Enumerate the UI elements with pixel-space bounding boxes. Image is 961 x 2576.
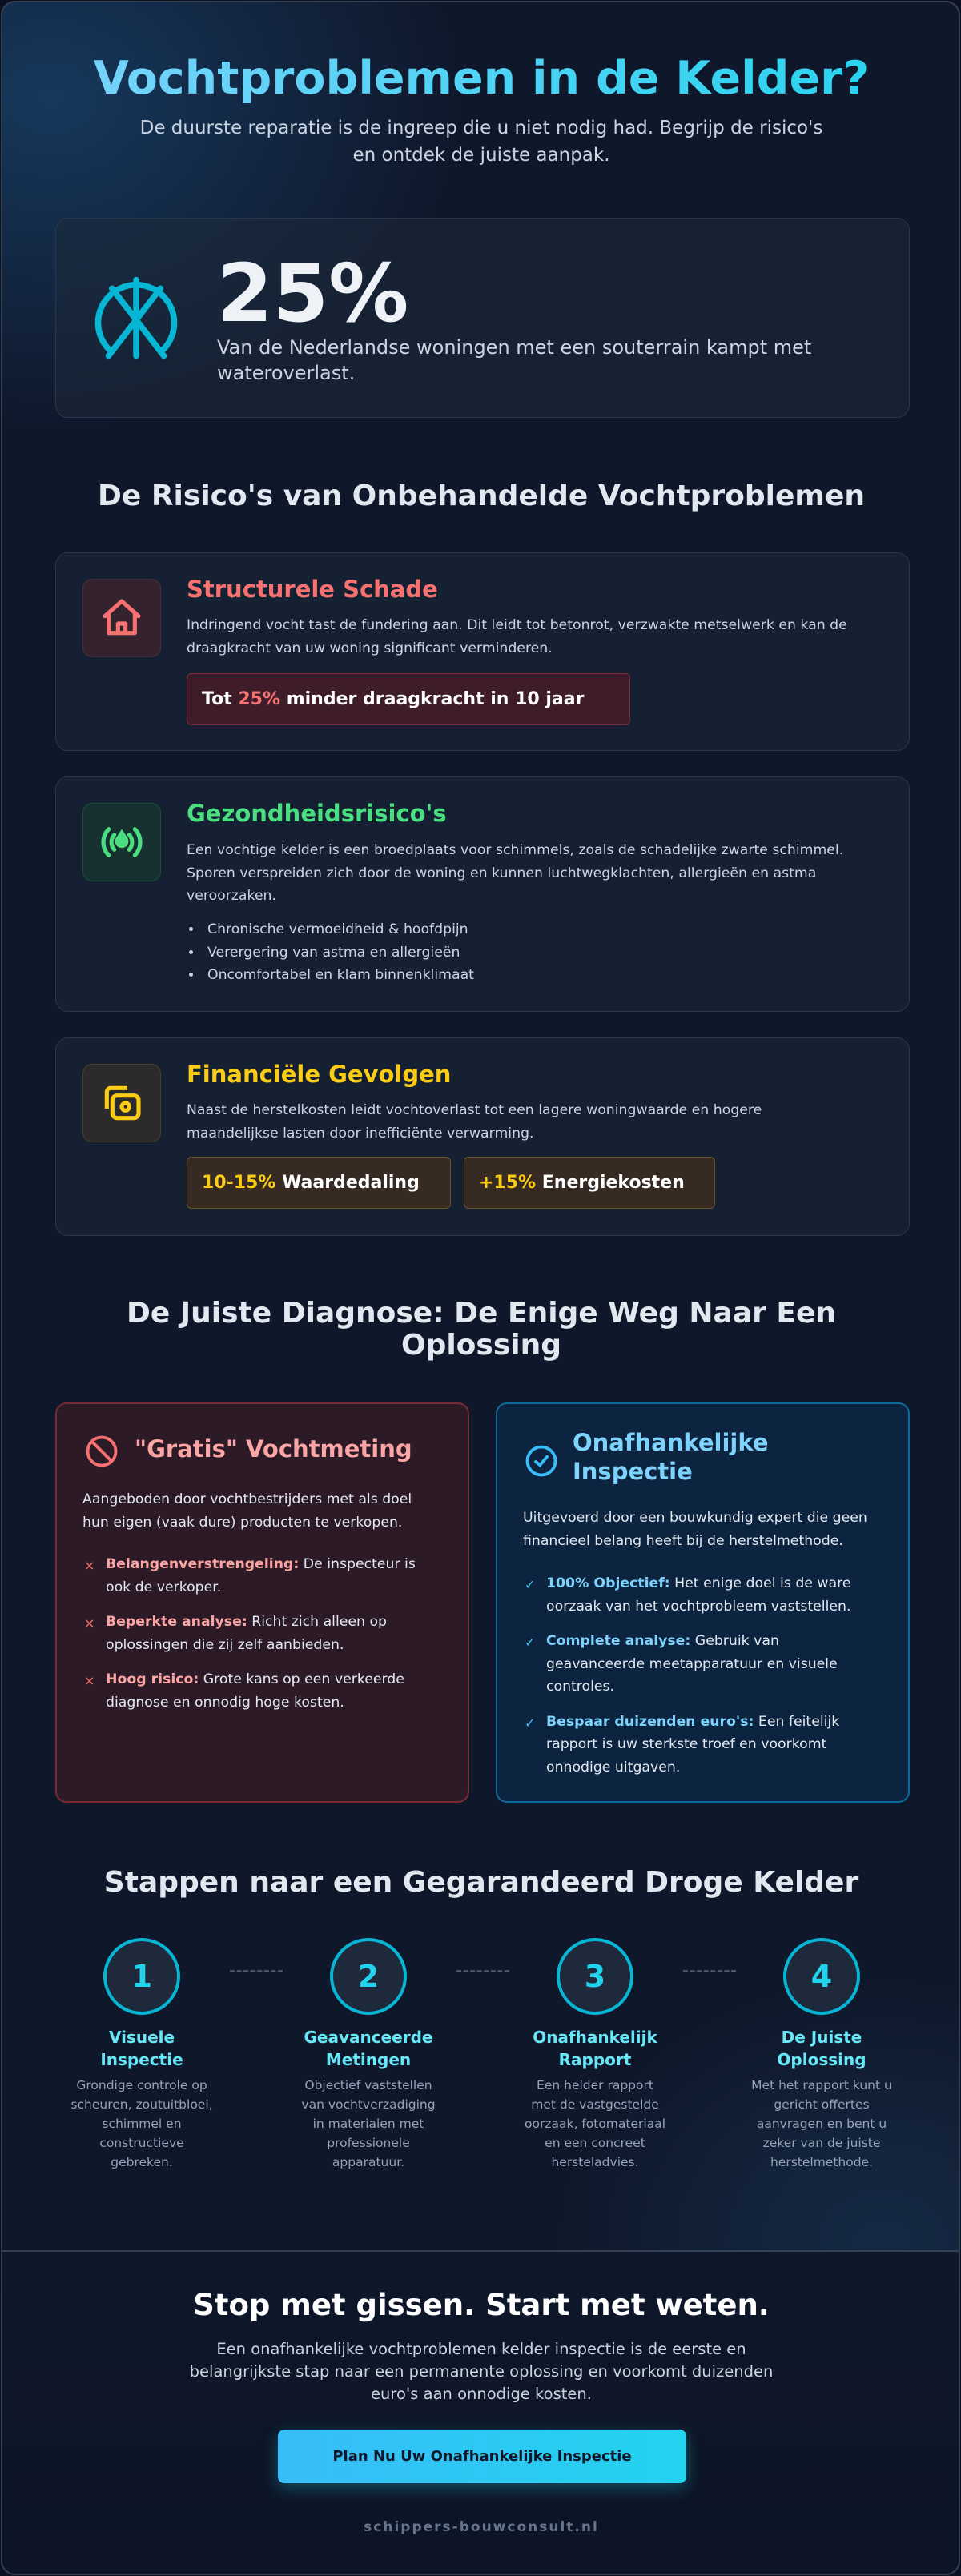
step 4: Met het rapport kunt u gericht offertes aanvragen en bent u zeker van de juiste herstelmethode. <box>751 2078 892 2169</box>
step 2: Geavanceerde <box>304 2028 432 2047</box>
footer text: Een onafhankelijke vochtproblemen kelder inspectie is de eerste en belangrijkste stap naar een permanente oplossing en voorkomt duizenden euro's aan onnodige kosten. <box>190 2340 773 2403</box>
icon: spores <box>82 803 161 881</box>
step 3: Een helder rapport met de vastgestelde oorzaak, fotomateriaal en een concreet hersteladvies. <box>525 2078 665 2169</box>
badge <box>187 1157 451 1209</box>
step 4: 4 <box>811 1959 832 1994</box>
card text: Aangeboden door vochtbestrijders met als doel hun eigen (vaak dure) producten te verkopen. <box>82 1491 412 1531</box>
stat text: Van de Nederlandse woningen met een souterrain kampt met wateroverlast. <box>217 336 811 384</box>
icon: forbidden <box>86 1436 117 1467</box>
step 2: Metingen <box>326 2050 411 2069</box>
step 2: 2 <box>358 1959 379 1994</box>
list: Oncomfortabel en klam binnenklimaat <box>207 967 474 983</box>
panel: gratis vochtmeting <box>55 1402 469 1803</box>
panel: onafhankelijke inspectie <box>496 1402 910 1803</box>
subtitle: De duurste reparatie is de ingreep die u niet nodig had. Begrijp de risico's en ontdek de juiste aanpak. <box>140 118 822 166</box>
list: Verergering van astma en allergieën <box>207 945 460 961</box>
icon: check circle <box>525 1446 557 1476</box>
stat number: 25% <box>217 247 408 340</box>
badge: 25% <box>238 689 280 709</box>
step 1: Inspectie <box>100 2050 183 2069</box>
card title: Gezondheidsrisico's <box>187 800 447 827</box>
step 3 <box>525 1938 665 2169</box>
step 3: 3 <box>585 1959 605 1994</box>
step 2: Objectief vaststellen van vochtverzadiging in materialen met professionele apparatuur. <box>301 2078 436 2169</box>
card text: Een vochtige kelder is een broedplaats voor schimmels, zoals de schadelijke zwarte schimmel. Sporen verspreiden zich door de woning en kunnen luchtwegklachten, allergieën en astma veroorzaken. <box>187 842 843 904</box>
list: Chronische vermoeidheid & hoofdpijn <box>207 921 468 937</box>
arrow: dashed connector <box>230 1970 283 1972</box>
card text: Indringend vocht tast de fundering aan. Dit leidt tot betonrot, verzwakte metselwerk en kan de draagkracht van uw woning significant verminderen. <box>187 617 847 656</box>
badge: Energiekosten <box>542 1173 685 1193</box>
badge: Tot minder draagkracht in 10 jaar <box>202 689 584 709</box>
heading: steps: Stappen naar een Gegarandeerd Droge Kelder <box>104 1866 858 1899</box>
button <box>278 2430 686 2483</box>
list: cons: Beperkte analyse: Richt zich alleen op oplossingen die zij zelf aanbieden. <box>106 1614 387 1652</box>
card text: Naast de herstelkosten leidt vochtoverlast tot een lagere woningwaarde en hogere maandelijkse lasten door inefficiënte verwarming. <box>187 1102 762 1142</box>
step 1: 1 <box>131 1959 152 1994</box>
card title: Onafhankelijke <box>573 1429 769 1456</box>
list: cons: Belangenverstrengeling: De inspecteur is ook de verkoper. <box>106 1556 416 1595</box>
step 1: Visuele <box>109 2028 175 2047</box>
arrow: dashed connector <box>456 1970 509 1972</box>
footer heading: Stop met gissen. Start met weten. <box>193 2288 770 2322</box>
heading: risks: De Risico's van Onbehandelde Vochtproblemen <box>98 479 865 512</box>
badge: Waardedaling <box>282 1173 420 1193</box>
panel: gezondheidsrisico's <box>55 776 910 1012</box>
card text: Uitgevoerd door een bouwkundig expert die geen financieel belang heeft bij de herstelmethode. <box>523 1510 867 1548</box>
panel: financiële gevolgen <box>55 1037 910 1236</box>
list: pros: ✓ <box>525 1715 535 1731</box>
card title: Financiële Gevolgen <box>187 1061 451 1088</box>
badge: +15% <box>479 1173 536 1193</box>
card title: Inspectie <box>573 1458 693 1485</box>
badge <box>464 1157 715 1209</box>
list: cons <box>84 1556 416 1710</box>
footer panel <box>2 2250 960 2576</box>
step 2 <box>301 1938 436 2169</box>
list: pros: ✓ <box>525 1635 535 1650</box>
card title: "Gratis" Vochtmeting <box>135 1435 412 1463</box>
list: cons: Hoog risico: Grote kans op een verkeerde diagnose en onnodig hoge kosten. <box>106 1671 404 1710</box>
button: Plan Nu Uw Onafhankelijke Inspectie <box>332 2448 632 2465</box>
panel: stat card <box>55 218 910 418</box>
badge: 10-15% <box>202 1173 275 1193</box>
list <box>189 921 474 983</box>
list: cons: × <box>84 1558 94 1573</box>
step 3: Rapport <box>559 2050 631 2069</box>
heading: diagnose: De Juiste Diagnose: De Enige Weg Naar Een Oplossing <box>127 1297 836 1362</box>
panel: structurele schade <box>55 552 910 751</box>
step 1 <box>70 1938 213 2169</box>
list: pros <box>525 1575 850 1776</box>
list: cons: × <box>84 1615 94 1631</box>
step 1: Grondige controle op scheuren, zoutuitbloei, schimmel en constructieve gebreken. <box>70 2078 213 2169</box>
step 4 <box>751 1938 892 2169</box>
arrow: dashed connector <box>683 1970 736 1972</box>
icon: house <box>82 579 161 657</box>
list: pros: Bespaar duizenden euro's: Een feitelijk rapport is uw sterkste troef en voorkomt onnodige uitgaven. <box>546 1713 839 1776</box>
icon: money <box>82 1064 161 1142</box>
title: Vochtproblemen in de Kelder? <box>94 52 869 105</box>
step 3: Onafhankelijk <box>533 2028 657 2047</box>
step 4: Oplossing <box>777 2050 867 2069</box>
list: pros: 100% Objectief: Het enige doel is de ware oorzaak van het vochtprobleem vaststellen. <box>546 1575 850 1614</box>
footer url: schippers-bouwconsult.nl <box>364 2519 599 2535</box>
list: cons: × <box>84 1673 94 1688</box>
list: pros: Complete analyse: Gebruik van geavanceerde meetapparatuur en visuele controles. <box>546 1633 838 1695</box>
card title: Structurele Schade <box>187 576 438 603</box>
card title <box>573 1429 769 1485</box>
step 4: De Juiste <box>782 2028 862 2047</box>
list: pros: ✓ <box>525 1577 535 1592</box>
icon: water gauge <box>94 277 178 359</box>
badge <box>187 673 630 725</box>
